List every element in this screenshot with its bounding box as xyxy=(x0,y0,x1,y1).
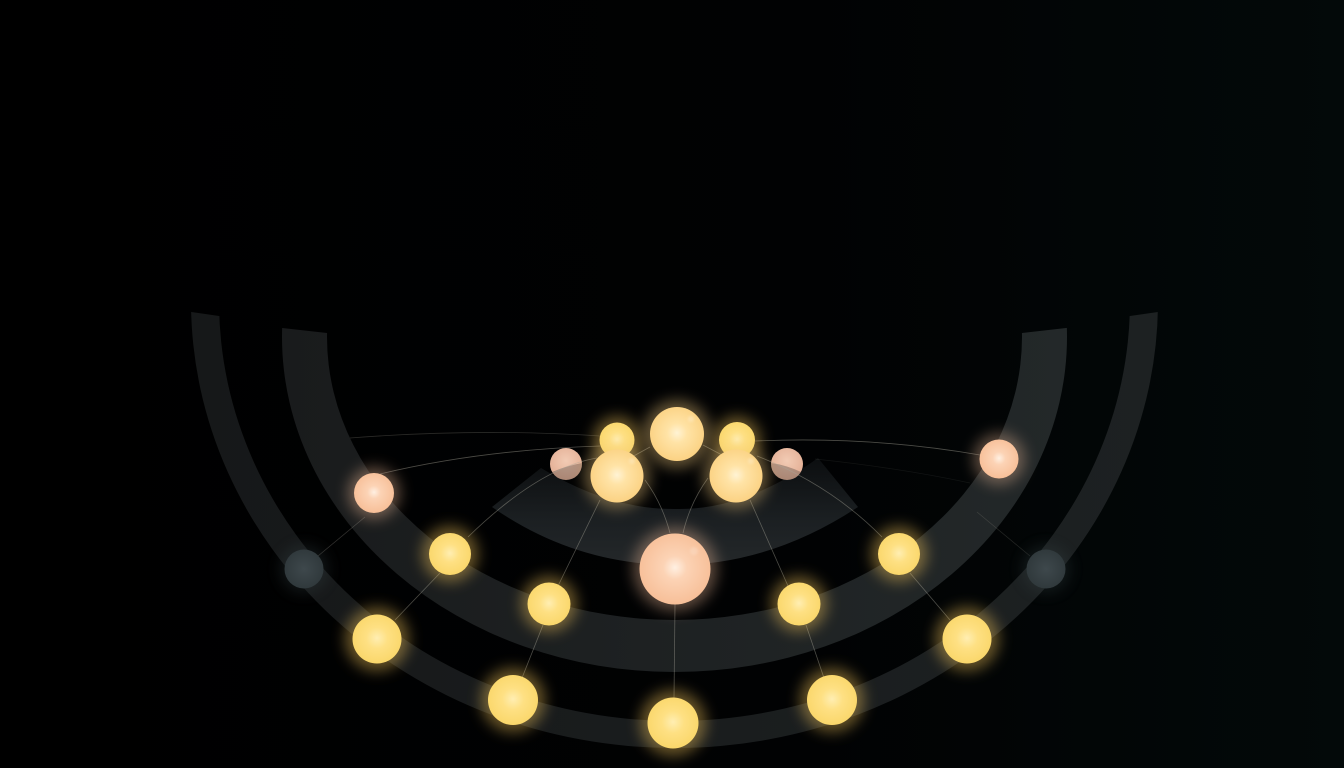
node: outer ring yellow far left xyxy=(345,607,409,671)
node: upper yellow right xyxy=(713,416,761,464)
node: outer ring yellow left xyxy=(481,668,545,732)
node: middle ring yellow left xyxy=(521,576,577,632)
arc: middle ring xyxy=(282,328,1067,672)
inner fan sector xyxy=(492,458,858,565)
node: outer ring grey right xyxy=(1022,545,1070,593)
node: middle ring yellow far right xyxy=(871,526,927,582)
node: outer ring yellow right xyxy=(800,668,864,732)
node: middle ring yellow far left xyxy=(422,526,478,582)
node: top centre cream xyxy=(643,400,711,468)
node: pink right xyxy=(973,433,1025,485)
node: pink left xyxy=(348,467,400,519)
node: dim pink right xyxy=(771,448,803,480)
arc: outer ring xyxy=(191,312,1158,748)
node: central pink xyxy=(633,527,717,611)
connector lines xyxy=(318,432,1030,698)
node: dim pink left xyxy=(550,448,582,480)
node: outer ring grey left xyxy=(280,545,328,593)
node: middle ring yellow right xyxy=(771,576,827,632)
node: outer ring yellow far right xyxy=(935,607,999,671)
node: outer ring yellow bottom xyxy=(640,690,706,756)
node: cream right xyxy=(703,443,769,509)
node: upper yellow left xyxy=(593,416,641,464)
node: cream left xyxy=(584,443,650,509)
